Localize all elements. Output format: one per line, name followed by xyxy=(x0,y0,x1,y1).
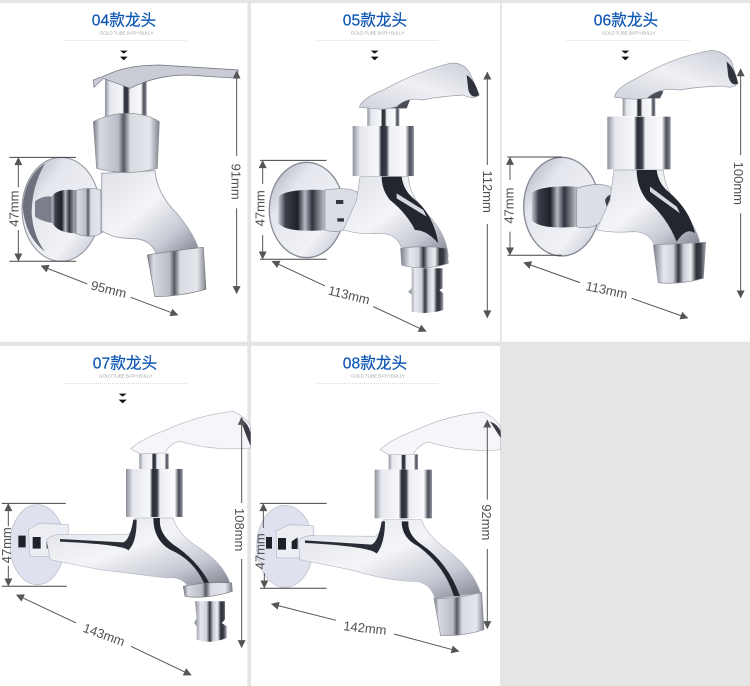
title: 04: 04款龙头 xyxy=(92,11,156,29)
faucet 08 xyxy=(257,412,501,636)
dimension: 113mm xyxy=(272,261,426,331)
dimension: 95mm xyxy=(41,266,178,315)
dimension: 108mm: 108mm xyxy=(232,508,247,551)
dimension: 47mm xyxy=(0,503,67,586)
icon: double down arrow xyxy=(371,51,379,60)
dimension: 47mm: 47mm xyxy=(252,533,267,569)
faucet 07 xyxy=(10,411,251,642)
title: 05: 05款龙头 xyxy=(343,11,407,29)
faucet 06 xyxy=(524,51,738,283)
title: 08: 08款龙头 xyxy=(343,354,407,372)
subtitle: 08: GOLD TUBE BATH BULLY xyxy=(351,373,406,379)
dimension: 143mm xyxy=(17,595,191,675)
dimension: 142mm xyxy=(272,604,459,651)
icon: double down arrow xyxy=(621,51,629,60)
icon: double down arrow xyxy=(119,394,127,403)
dimension: 47mm: 47mm xyxy=(6,191,21,227)
dimension: 92mm: 92mm xyxy=(479,504,494,540)
subtitle: 07: GOLD TUBE BATH BULLY xyxy=(99,373,153,379)
icon: double down arrow xyxy=(120,51,128,60)
dimension: 91mm: 91mm xyxy=(228,164,243,200)
dimension: 142mm: 142mm xyxy=(343,618,387,638)
dimension: 47mm xyxy=(501,157,562,255)
dimension: 113mm xyxy=(524,263,688,318)
subtitle: 05: GOLD TUBE BATH BULLY xyxy=(351,30,405,36)
subtitle: 06: GOLD TUBE BATH BULLY xyxy=(602,30,656,36)
dimension: 100mm: 100mm xyxy=(731,162,746,205)
dimension: 47mm xyxy=(6,157,76,261)
dimension: 113mm: 113mm xyxy=(584,278,629,302)
dimension: 47mm: 47mm xyxy=(252,190,267,226)
faucet 05 xyxy=(269,63,479,313)
dimension: 143mm: 143mm xyxy=(81,620,127,649)
dimension: 95mm: 95mm xyxy=(89,278,128,301)
faucet 04 xyxy=(22,65,238,297)
dimension: 47mm: 47mm xyxy=(501,188,516,224)
dimension: 47mm xyxy=(252,503,327,588)
dimension: 112mm: 112mm xyxy=(480,170,495,213)
subtitle: 04: GOLD TUBE BATH BULLY xyxy=(100,30,154,36)
panel: model 08 xyxy=(251,346,501,686)
panel: model 07 xyxy=(0,346,251,686)
dimension: 113mm: 113mm xyxy=(327,283,371,307)
panel: model 04 xyxy=(0,3,247,342)
panel: model 05 xyxy=(251,3,500,342)
dimension: 47mm xyxy=(252,160,327,259)
title: 07: 07款龙头 xyxy=(93,354,157,372)
title: 06: 06款龙头 xyxy=(594,11,658,29)
panel: model 06 xyxy=(501,3,750,342)
